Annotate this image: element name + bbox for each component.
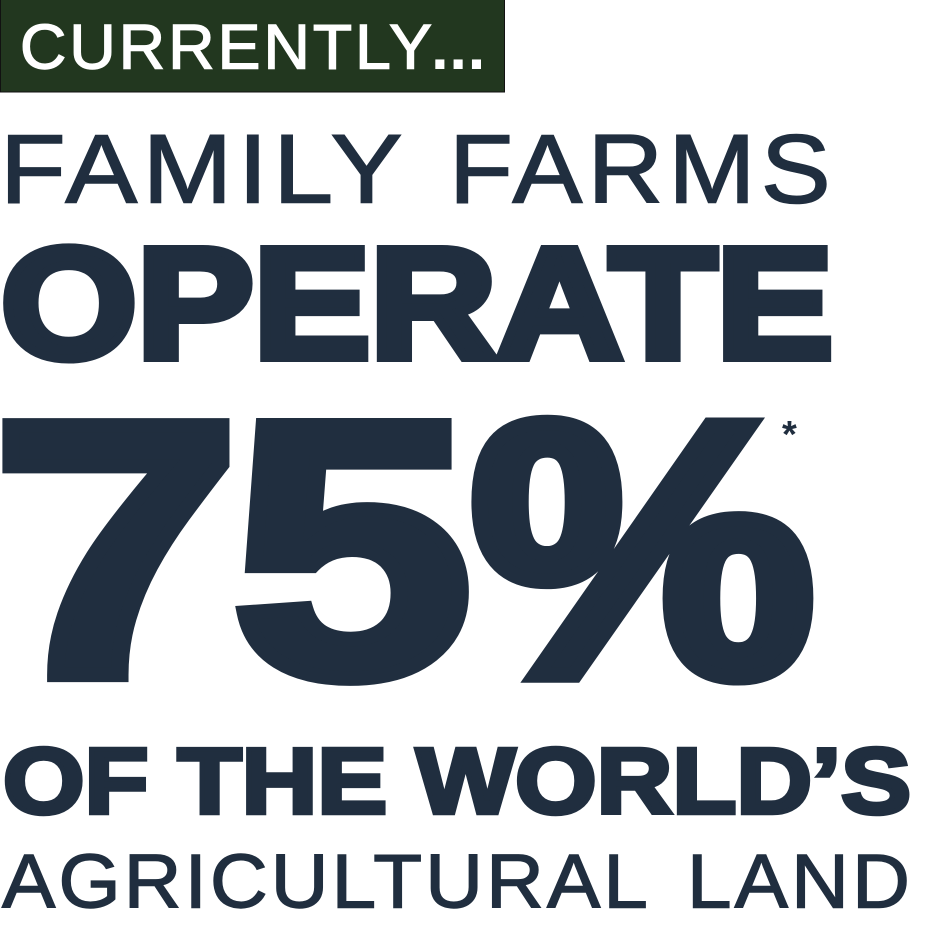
heading line: agricultural land: LAND <box>687 840 913 924</box>
heading line: family farms: FARMS <box>449 114 836 224</box>
banner: currently: ... <box>431 11 486 83</box>
banner: currently: CURRENTLY <box>20 12 435 82</box>
heading line: agricultural land <box>2 840 913 924</box>
banner: currently <box>0 0 504 92</box>
big stat: 75 percent: % <box>470 347 815 752</box>
footnote asterisk: * <box>782 414 797 456</box>
heading line: of the world's: OF THE WORLD’S <box>3 729 911 833</box>
heading line: operate: OPERATE <box>1 216 833 392</box>
heading line: family farms: FAMILY <box>0 114 408 224</box>
heading line: agricultural land: AGRICULTURAL <box>2 840 651 924</box>
big stat: 75 percent: 5 <box>232 347 472 752</box>
big stat: 75 percent <box>0 347 815 753</box>
heading line: family farms <box>0 114 836 224</box>
